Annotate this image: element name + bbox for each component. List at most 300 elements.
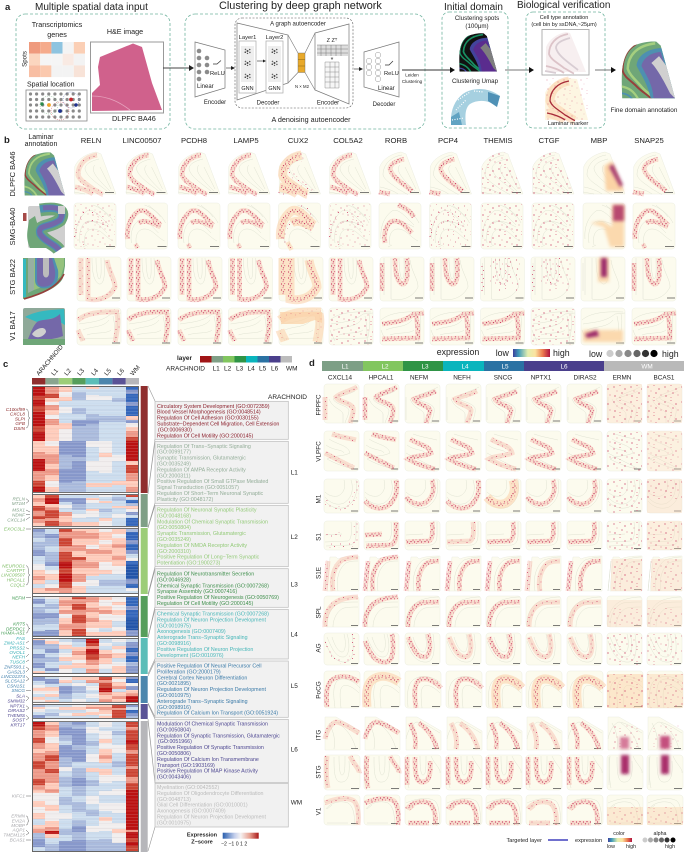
label: H&E image: H&E image	[107, 27, 143, 36]
gene headers: THEMIS	[483, 136, 513, 145]
row: SMG-BA40 maps	[74, 203, 675, 249]
gene labels: L6	[7, 694, 26, 728]
GO box: L1	[155, 441, 288, 503]
legend: expression z-score	[187, 832, 259, 848]
label: decoder: Decoder	[373, 102, 395, 108]
gene labels: L4: OVOL1	[9, 650, 25, 655]
legend: layer: L5	[259, 366, 267, 372]
rotated column labels: ARACHNOID	[35, 343, 65, 377]
legend: expression colour: expression	[437, 347, 479, 357]
gene headers: CTGF	[539, 136, 560, 145]
GO box: L3: Chemical Synaptic Transmission (GO:0007268)	[157, 583, 269, 589]
gene labels: L5: SLC5A12	[5, 679, 25, 684]
gene labels: WM: ERMN	[11, 814, 26, 819]
row: ITG maps	[325, 717, 683, 750]
graph encoder trapezoid: Z Zᵀ	[327, 37, 338, 44]
cluster: L6	[33, 704, 138, 719]
rotated column labels: L5	[103, 367, 113, 377]
encoder trapezoid: ReLU	[210, 71, 225, 77]
label: clustering spots: Clustering spots	[455, 15, 499, 22]
legend: expression colour: low	[496, 348, 510, 358]
label: clustering umap: Clustering Umap	[452, 78, 499, 85]
panel letter a: a	[5, 2, 11, 13]
gene labels: WM: AQP1	[11, 828, 25, 833]
layer header bar: L1	[341, 364, 349, 370]
gene labels: L3: NEFM	[12, 595, 25, 600]
gene labels: L5	[1, 665, 25, 693]
gene labels: L6: NPTX1	[10, 703, 25, 708]
GO box: WM: Axonogenesis (GO:0007409)	[157, 809, 226, 815]
label: a denoising autoencoder: A denoising autoencoder	[271, 115, 351, 124]
row: AG maps	[324, 633, 682, 665]
GO box: L1: (GO:2000311)	[157, 473, 191, 479]
GO box: L5: (GO:0010975)	[157, 693, 191, 699]
rotated column labels: L1	[50, 367, 60, 377]
graph decoder trapezoid: Layer1	[239, 35, 256, 41]
decoder trapezoid	[364, 42, 399, 97]
GO box: L4	[155, 609, 288, 659]
graph decoder trapezoid: Layer2	[266, 35, 283, 41]
row: STG BA22 maps	[77, 257, 676, 301]
gene labels: L2: LINC00507	[1, 573, 25, 578]
GO box: L5: Anterograde Trans−Synaptic Signaling	[157, 699, 248, 705]
gene labels: arachnoid: DSIN	[14, 426, 26, 431]
laminar annotation: DLPFC	[23, 152, 65, 197]
column colour strip	[32, 378, 139, 384]
gene headers	[81, 136, 664, 145]
laminar marker map	[545, 77, 588, 120]
connector lines	[148, 386, 155, 851]
GO box: arachnoid: (GO:0006930)	[158, 427, 192, 433]
cluster: L3	[33, 596, 138, 637]
clustering spots map	[458, 33, 497, 73]
arrow: to verification	[505, 67, 534, 73]
gene labels: L2	[1, 527, 26, 587]
GO box: arachnoid: Circulatory System Development (GO:0072359)	[157, 404, 270, 410]
gene labels: WM	[3, 794, 26, 843]
GO box: L1: Synaptic Transmission, Glutamatergic	[157, 456, 246, 462]
gene labels: L6: SOST	[12, 718, 26, 723]
laminar annotation: STG	[23, 258, 65, 299]
row labels	[316, 394, 322, 815]
gene brackets	[26, 409, 31, 840]
legend: layer: L2	[224, 366, 232, 372]
legend: layer: ARACHNOID	[166, 366, 205, 372]
row: DLPFC BA46 maps	[74, 152, 675, 194]
gene labels: L4	[3, 636, 26, 664]
encoder trapezoid: Linear	[197, 84, 214, 90]
label: DLPFC BA46: DLPFC BA46	[112, 114, 156, 123]
row labels: VLPFC	[316, 441, 322, 462]
GO box: L2: (GO:2000310)	[157, 549, 191, 555]
panel d: layer specific gene maps	[309, 347, 684, 850]
legend: layer: L3	[236, 366, 244, 372]
layer header bar: L2	[381, 364, 389, 370]
GO box: L6: (GO:0050804)	[157, 727, 191, 733]
gene headers: CXCL14	[328, 374, 353, 382]
legend: layer: WM	[286, 366, 298, 372]
panel: data input box	[16, 14, 170, 129]
legend: layer: L1	[212, 366, 220, 372]
label: genes: genes	[47, 30, 67, 39]
label: a graph autoencoder: A graph autoencoder	[270, 22, 326, 28]
fine domain annotation map	[620, 41, 675, 100]
GO box: arachnoid: Blood Vessel Morphogenesis (GO:0048514)	[157, 410, 261, 416]
GO box: WM	[155, 783, 288, 827]
gene labels: arachnoid: SLPI	[15, 416, 26, 421]
graph encoder trapezoid	[315, 24, 349, 104]
row labels: V1 BA17	[8, 311, 17, 341]
gene labels: L2: NEUROD1	[2, 563, 25, 568]
GO box: L6: Regulation Of Synaptic Transmission, Glutamatergic	[157, 733, 280, 739]
legend: bottom expression alpha: alpha	[654, 831, 667, 837]
GO box: L4: (GO:0098916)	[157, 641, 191, 647]
gene labels: arachnoid: C10orf99	[6, 407, 25, 412]
panel: GO term boxes	[155, 355, 307, 848]
row labels: SMG-BA40	[8, 208, 17, 245]
row labels: S1E	[316, 567, 322, 579]
row labels: SPL	[316, 606, 322, 619]
gene headers: RELN	[81, 136, 101, 145]
heading: clustering: Clustering by deep graph network	[219, 0, 382, 12]
H&E image	[90, 42, 164, 113]
GO box: L6: Modulation Of Chemical Synaptic Transmission	[157, 722, 268, 728]
WM label: WM	[291, 800, 302, 806]
GO box: L4: Development (GO:0010976)	[157, 653, 224, 659]
GO box: L6	[155, 719, 288, 783]
gene labels: L1: CXCL14	[7, 517, 25, 522]
arrow: to initial domain, Leiden clustering: Leiden	[405, 72, 419, 78]
gene labels: L1	[7, 496, 26, 522]
legend: bottom expression color: low	[607, 844, 615, 850]
laminar annotation: SMG	[23, 206, 65, 250]
gene labels: WM: MOBP	[11, 823, 26, 828]
GO box: L1: Regulation Of Trans−Synaptic Signaling	[157, 444, 251, 450]
gene headers: LINC00507	[123, 136, 161, 145]
GO box: L2	[155, 505, 288, 567]
umap	[451, 89, 500, 125]
panel c: heatmap annotations	[1, 343, 155, 852]
gene labels: WM: BCAS1	[10, 838, 25, 843]
gene labels: L6: SLA	[16, 694, 25, 699]
GO box: WM: Glial Cell Differentiation (GO:0010001)	[157, 803, 248, 809]
GO box: L2: Potentiation (GO:1900273)	[157, 561, 221, 567]
GO box: L5: (GO:0098916)	[157, 705, 191, 711]
GO box: WM: Myelination (GO:0042552)	[157, 785, 219, 791]
row labels: ITG	[316, 730, 322, 740]
legend: bottom expression color	[575, 831, 636, 850]
GO box: L4: Positive Regulation Of Neuron Projection	[157, 647, 253, 653]
legend: expression z-score: Z−score	[191, 840, 213, 846]
row: VLPFC maps	[324, 431, 682, 471]
GO box: L5	[155, 661, 288, 717]
heading: multiple spatial data input: Multiple spatial data input	[35, 2, 148, 13]
cluster: L1	[33, 494, 138, 527]
row labels: S1	[316, 533, 322, 541]
GO box: L6: Positive Regulation Of MAP Kinase Activity	[157, 769, 258, 775]
heading: annotation line: annotation	[25, 141, 57, 148]
rotated column labels	[35, 343, 142, 377]
row: SPL maps	[324, 596, 682, 627]
gene labels: L1: MT1M	[12, 501, 25, 506]
panel: deep graph network box	[185, 14, 425, 129]
legend: expression z-score: Expression	[187, 832, 218, 838]
gene labels: L5: CSN1S1	[7, 683, 25, 688]
GO box: L1: Signal Transduction (GO:0051057)	[157, 485, 239, 491]
gene labels: L5: LINC01374	[1, 674, 25, 679]
GO box: L2: (GO:0035249)	[157, 537, 191, 543]
GO box: L6: (GO:0051966)	[158, 739, 192, 745]
legend: layer: layer	[177, 355, 192, 362]
row labels: M1	[316, 494, 322, 503]
legend: bottom expression alpha: high	[665, 844, 675, 850]
label: N x M2: N × M2	[295, 84, 310, 89]
legend: bottom expression alpha	[642, 831, 676, 850]
gene labels: L6: SMIM32	[8, 698, 25, 703]
label: cell type annotation: Cell type annotation	[540, 15, 588, 21]
GO box: L4: (GO:0010975)	[157, 623, 191, 629]
GO box: L2: (GO:0048168)	[157, 513, 191, 519]
gene labels: L1: RELN	[12, 496, 26, 501]
gene labels: L4: ZIM2-AS1	[3, 641, 25, 646]
panel letter c: c	[3, 359, 8, 370]
gene headers: NPTX1	[531, 374, 552, 382]
layer side bars	[141, 386, 148, 852]
layer header bar: L6	[560, 364, 568, 370]
gene labels: L3	[1, 595, 25, 636]
GO box: L2: Regulation Of NMDA Receptor Activity	[157, 543, 247, 549]
gene headers	[328, 374, 675, 382]
GO box: L2: Positive Regulation Of Long−Term Synaptic	[157, 555, 260, 561]
cluster: L5	[33, 676, 138, 703]
arrow: to initial domain, Leiden clustering	[402, 67, 455, 84]
layer header bar: L3	[421, 364, 429, 370]
row labels: PoCG	[316, 681, 322, 699]
GO box: L6: Regulation Of Calcium Ion Transmembrane	[157, 757, 259, 763]
GO box: arachnoid	[155, 401, 288, 439]
GO box: arachnoid: Substrate−Dependent Cell Migration, Cell Extension	[157, 422, 279, 428]
heading: initial domain: Initial domain	[444, 2, 503, 13]
legend: expression alpha: low	[589, 349, 603, 359]
label: transcriptomics genes: Transcriptomics	[32, 20, 83, 29]
row: S1E maps	[325, 556, 682, 591]
gene headers: SNAP25	[634, 136, 664, 145]
gene headers: SNCG	[494, 374, 512, 382]
GO box: L4: Anterograde Trans−Synaptic Signaling	[157, 635, 248, 641]
GO box: L3: Regulation Of Cell Motility (GO:2000145)	[157, 601, 254, 607]
gene labels: L6: THEMIS	[7, 713, 26, 718]
row labels: DLPFC BA46	[8, 151, 17, 197]
graph decoder trapezoid: GNN	[268, 86, 281, 92]
label: 100 um: (100μm)	[465, 23, 489, 30]
L1 label: L1	[291, 470, 298, 476]
L4 label: L4	[291, 632, 298, 638]
GO box: L6: Positive Regulation Of Synaptic Transmission	[157, 745, 264, 751]
row labels: V1	[316, 807, 322, 815]
gene labels: L5: ZNF593.1	[3, 665, 25, 670]
row labels: STG	[316, 765, 322, 779]
panel: biological verification box	[526, 12, 605, 128]
layer header bar: WM	[641, 364, 653, 370]
gene labels: L3: KRT5	[13, 622, 25, 627]
heading: laminar annotation: Laminar	[28, 134, 54, 141]
rotated column labels: L2	[63, 367, 73, 377]
gene labels: L1: MSX1	[12, 508, 25, 513]
legend: layer: L6	[271, 366, 279, 372]
gene headers: PCDH8	[181, 136, 207, 145]
row: FPPFC maps	[324, 384, 682, 423]
gene headers: RORB	[385, 136, 407, 145]
label: cell bin: (cell bin by ssDNA,~25μm)	[531, 22, 597, 28]
GO box: L1: (GO:0035249)	[157, 462, 191, 468]
GO box: L1: Positive Regulation Of Small GTPase Mediated	[157, 479, 268, 485]
latent bar	[288, 33, 315, 90]
decoder trapezoid: Linear	[378, 86, 395, 92]
GO box: L5: Cerebral Cortex Neuron Differentiation	[157, 675, 247, 681]
L3 label: L3	[291, 582, 298, 588]
gene headers: BCAS1	[654, 374, 675, 382]
heatmap	[32, 386, 139, 852]
gene headers: CUX2	[288, 136, 308, 145]
rotated column labels: L6	[116, 367, 126, 377]
row: M1 maps	[324, 479, 682, 513]
legend: layer: L4	[248, 366, 255, 372]
gene labels: arachnoid: GFB	[15, 421, 25, 426]
legend: expression alpha: high	[662, 349, 679, 359]
GO box: L4: Axonogenesis (GO:0007409)	[157, 629, 226, 635]
label: decoder: Decoder	[257, 100, 279, 106]
GO box: L1: Regulation Of AMPA Receptor Activity	[157, 467, 246, 473]
expression grid	[29, 42, 85, 77]
gene labels: L1: NDNF	[12, 512, 26, 517]
panel letter d: d	[309, 358, 315, 369]
row labels: FPPFC	[316, 394, 322, 415]
gene labels: L6: KRT17	[10, 723, 25, 728]
arrow: to fine domain	[595, 67, 616, 73]
gene labels: L2: CARTPT	[6, 568, 26, 573]
legend: expression colour	[437, 347, 570, 358]
decoder trapezoid: ReLU	[384, 71, 399, 77]
label: spatial location: Spatial location	[27, 82, 75, 88]
GO box: L3: Regulation Of Neurotransmitter Secretion	[157, 572, 254, 578]
L6 label: L6	[291, 746, 298, 754]
legend: expression alpha	[589, 349, 679, 359]
gene labels: WM: KIFC1	[12, 794, 25, 799]
gene labels: L3: HAMA-AS1	[1, 631, 25, 636]
encoder trapezoid	[195, 42, 225, 97]
layer header bar: L5	[501, 364, 509, 370]
GO box: L1: Regulation Of Short−Term Neuronal Synaptic	[157, 491, 263, 497]
GO box: L6: Transport (GO:1903169)	[157, 763, 215, 769]
arrow	[354, 67, 363, 71]
heatmap row texture	[32, 386, 139, 852]
panel letter b: b	[4, 135, 10, 146]
legend: expression colour: high	[553, 348, 570, 358]
cell type map	[542, 30, 589, 75]
gene labels: L5: GAS2L3	[7, 669, 25, 674]
row labels	[8, 151, 17, 341]
legend: bottom expression color: high	[626, 844, 636, 850]
cluster: WM	[33, 721, 138, 851]
rotated column labels: L3	[76, 367, 86, 377]
gene labels: L2: HPCAL1	[7, 577, 25, 582]
GO box: L3: (GO:0046928)	[157, 577, 191, 583]
arrow: encoder to GNN	[226, 66, 235, 70]
laminar annotation: V1	[23, 308, 65, 345]
gene labels: L5: SNCG	[11, 688, 25, 693]
gene labels: L2: C1QL2	[10, 582, 25, 587]
label: fine domain annotation: Fine domain annotation	[611, 107, 678, 114]
gene labels: L4: NEFH	[12, 655, 26, 660]
label: encoder: Encoder	[317, 100, 339, 106]
gene labels: L3: DEPDC1	[6, 626, 25, 631]
gene labels: L2: EXOC3L2	[4, 527, 25, 532]
L5 label: L5	[291, 683, 298, 690]
panel b: layer marker maps	[4, 134, 676, 345]
row labels: STG BA22	[8, 259, 17, 295]
GO box: L2: Regulation Of Neuronal Synaptic Plasticity	[157, 508, 257, 514]
GO box: L1: (GO:0099177)	[157, 450, 191, 456]
legend: targeted layer	[506, 838, 568, 844]
gene labels: L4: PRSS2	[10, 645, 25, 650]
row: V1 maps	[324, 795, 683, 825]
arrow: to encoder	[163, 65, 194, 71]
GO box: L5: (GO:0021895)	[157, 681, 191, 687]
legend: bottom expression color: expression	[575, 838, 602, 844]
L2 label: L2	[291, 534, 298, 541]
GO box: WM: (GO:0048713)	[157, 797, 191, 803]
layer header bar	[322, 361, 684, 371]
row: V1 BA17 maps	[77, 308, 676, 345]
GO box: arachnoid: Regulation Of Cell Adhesion (GO:0030155)	[157, 416, 259, 422]
label: spots: Spots	[22, 51, 28, 67]
row labels: AG	[316, 643, 322, 653]
gene headers: PCP4	[438, 136, 459, 145]
legend: bottom expression color: color	[613, 831, 625, 837]
gene headers: NEFH	[453, 374, 471, 382]
gene headers: LAMP5	[233, 136, 259, 145]
GO box: WM: Regulation Of Neuron Projection Development	[157, 814, 266, 820]
GO box: L6: (GO:0043406)	[157, 775, 191, 781]
gene labels: arachnoid: CXCL8	[10, 412, 25, 417]
legend: expression z-score: −2 −1 0 1 2	[221, 842, 247, 848]
gene headers: HPCAL1	[369, 374, 394, 382]
rotated column labels: L4	[90, 367, 100, 377]
GO box: arachnoid: Regulation Of Cell Motility (GO:2000145)	[157, 433, 254, 439]
GO box: L3: Synapse Assembly (GO:0007416)	[157, 589, 237, 595]
gene headers: DIRAS2	[573, 374, 597, 382]
GO box: L5: Regulation Of Calcium Ion Transport (GO:0051924)	[157, 711, 278, 717]
gene headers: MBP	[591, 136, 607, 145]
gene headers: COL5A2	[333, 136, 363, 145]
inner graph autoencoder dashed box	[235, 18, 353, 108]
cluster: arachnoid	[33, 387, 138, 493]
graph decoder trapezoid	[237, 23, 288, 100]
GO box: L2: Modulation Of Chemical Synaptic Transmission	[157, 519, 268, 525]
gene labels: L6: DIRAS2	[8, 708, 25, 713]
gene labels: L4: FAS	[16, 636, 26, 641]
cluster: L2	[33, 528, 138, 594]
gene headers: ERMN	[613, 374, 632, 382]
row: S1 maps	[324, 521, 682, 550]
GO box: L3	[155, 569, 288, 607]
GO box: WM: (GO:0010975)	[157, 820, 191, 826]
GO box: L4: Chemical Synaptic Transmission (GO:0007268)	[157, 612, 269, 618]
GO box: L5: Regulation Of Neuron Projection Development	[157, 687, 266, 693]
label: laminar marker: Laminar marker	[548, 121, 588, 127]
GO box: L6: (GO:0050806)	[157, 751, 191, 757]
panel a: workflow	[5, 0, 678, 129]
